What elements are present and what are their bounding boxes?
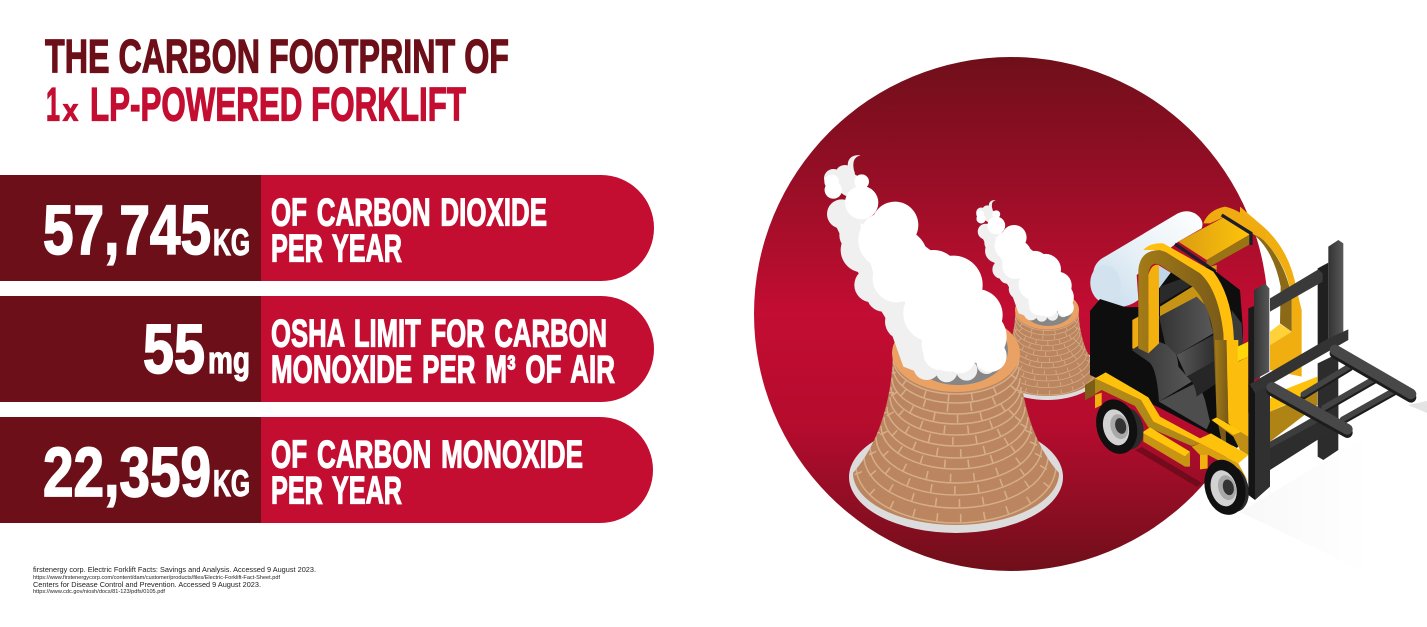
label: carbon monoxide: PER YEAR: [271, 470, 402, 512]
propane tank: [1088, 211, 1202, 307]
forklift: [1085, 207, 1411, 520]
illustration background circle: [754, 57, 1268, 571]
sources: [33, 565, 316, 595]
value: 22,359 kg: KG: [213, 463, 250, 504]
forklift body: [1090, 267, 1243, 448]
front yellow column: [1212, 340, 1248, 455]
sources: firstenergy corp. Electric Forklift Facts: Savings and Analysis. Accessed 9 August 2023.: [33, 565, 316, 574]
label: OSHA limit: [271, 312, 615, 392]
label: carbon monoxide: OF CARBON MONOXIDE: [271, 434, 583, 476]
label: carbon dioxide: [271, 192, 547, 270]
title line 1: THE CARBON FOOTPRINT OF: [45, 30, 509, 82]
value: 57,745 kg: 57,745: [43, 191, 211, 269]
label: carbon monoxide: [271, 434, 583, 512]
title line 2: x: [63, 92, 79, 128]
value: 22,359 kg: 22,359: [43, 433, 211, 511]
ground shadow of forklift: [1135, 401, 1427, 600]
chassis band: [1085, 372, 1248, 482]
value: 55 mg: 55: [143, 310, 205, 388]
stat bar: OSHA limit: [0, 296, 654, 402]
small smoke plume: [976, 200, 1074, 322]
stat bar: carbon monoxide: [0, 417, 653, 523]
operator seat: [1132, 275, 1243, 429]
roof canopy: [1175, 207, 1265, 275]
stat bar: carbon dioxide: [0, 175, 654, 281]
value: 57,745 kg: KG: [213, 222, 250, 263]
label: carbon dioxide: PER YEAR: [271, 228, 402, 270]
title: [45, 30, 509, 130]
title line 2: [46, 78, 466, 130]
rear wheel: [1090, 395, 1148, 459]
forks: [1272, 350, 1411, 433]
label: OSHA limit: OSHA LIMIT FOR CARBON: [271, 312, 607, 356]
label: OSHA limit: MONOXIDE PER M³ OF AIR: [271, 348, 615, 392]
sources: https://www.cdc.gov/niosh/docs/81-123/pdfs/0105.pdf: [33, 589, 166, 595]
sources: Centers for Disease Control and Prevention. Accessed 9 August 2023.: [33, 580, 261, 589]
title line 2: 1: [46, 78, 60, 130]
front roll cage: [1138, 243, 1237, 467]
mast: [1248, 240, 1348, 500]
value: 55 mg: mg: [208, 340, 250, 382]
front wheel: [1198, 455, 1254, 520]
large cooling tower: [824, 155, 1063, 533]
title line 2: LP-POWERED FORKLIFT: [90, 78, 466, 130]
large smoke plume: [824, 155, 1007, 382]
sources: https://www.firstenergycorp.com/content/dam/customer/products/files/Electric-Forklift-Fact-Sheet.pdf: [33, 575, 281, 581]
label: carbon dioxide: OF CARBON DIOXIDE: [271, 192, 547, 234]
far roll cage and rear panels: [1240, 207, 1338, 460]
small cooling tower: [976, 200, 1100, 400]
